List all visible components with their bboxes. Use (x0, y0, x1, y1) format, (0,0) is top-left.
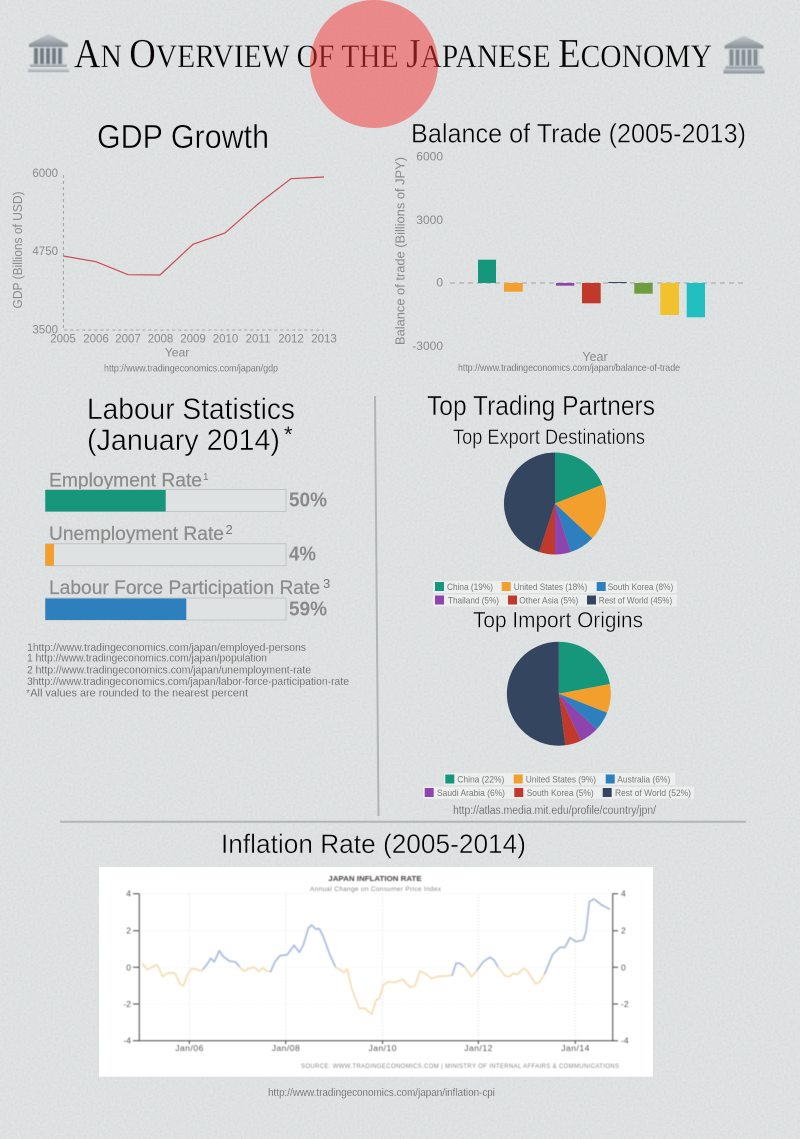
heading: Top Export Destinations: Top Export Destinations (453, 426, 645, 449)
footnotes: 1http://www.tradingeconomics.com/japan/employed-persons (27, 642, 306, 654)
footnotes: 2 http://www.tradingeconomics.com/japan/unemployment-rate (27, 664, 311, 676)
line chart: GDP: 2007 (115, 334, 141, 346)
chart image: Japan inflation rate: Jan/08 (272, 1043, 300, 1053)
legend: exports: Thailand (5%) (448, 596, 499, 606)
heading: Balance of Trade: Balance of Trade (2005-2013) (411, 119, 746, 149)
bar: employment rate: 1 (203, 472, 209, 483)
heading: Labour Statistics (87, 393, 295, 457)
heading: GDP Growth: GDP Growth (97, 118, 269, 155)
source: trading partners: http://atlas.media.mit.edu/profile/country/jpn/ (453, 805, 657, 817)
chart image: Japan inflation rate: Jan/10 (368, 1043, 397, 1053)
heading: Labour Statistics: (January 2014) (87, 424, 280, 457)
bar: unemployment rate: 2 (226, 522, 233, 537)
chart image: Japan inflation rate: 2 (621, 926, 626, 936)
source: inflation: http://www.tradingeconomics.com/japan/inflation-cpi (268, 1087, 495, 1099)
line chart: GDP (10, 168, 337, 360)
chart image: Japan inflation rate: 0 (621, 962, 626, 972)
chart image: Japan inflation rate: -4 (621, 1036, 629, 1046)
bar: unemployment rate (45, 522, 316, 566)
bar chart: balance of trade (392, 150, 743, 364)
line chart: GDP: 2009 (180, 334, 206, 346)
bar: employment rate: Employment Rate (49, 471, 202, 492)
bar chart: balance of trade: 6000 (416, 150, 443, 164)
panel: top trading partners (423, 390, 694, 817)
chart image: Japan inflation rate: Jan/06 (175, 1043, 204, 1053)
bar: unemployment rate: 4% (289, 544, 316, 566)
chart image: Japan inflation rate: JAPAN INFLATION RATE (328, 874, 422, 883)
legend: exports (433, 581, 677, 606)
heading: Inflation Rate: Inflation Rate (2005-2014) (221, 829, 526, 859)
legend: imports: South Korea (5%) (527, 788, 594, 799)
line chart: GDP: 3500 (32, 324, 58, 336)
bar: labour force participation rate: 3 (323, 576, 330, 591)
line chart: GDP: 2008 (148, 334, 173, 346)
heading: Labour Statistics: * (284, 422, 293, 447)
bar chart: balance of trade: Balance of trade (Billions of JPY) (392, 157, 408, 345)
chart image: Japan inflation rate: SOURCE: WWW.TRADINGECONOMICS.COM | MINISTRY OF INTERNAL AFFAIRS & COMMUNICATIONS (301, 1064, 619, 1070)
pie chart: exports (504, 452, 606, 554)
legend: imports: United States (9%) (526, 774, 596, 786)
panel: GDP growth (10, 118, 337, 375)
bar chart: balance of trade: 0 (436, 276, 443, 290)
line chart: GDP: 2010 (213, 334, 238, 346)
legend: imports: Australia (6%) (617, 774, 670, 786)
bar: labour force participation rate: 59% (289, 599, 327, 621)
icon: right bank building (724, 36, 764, 74)
panel: inflation rate (99, 829, 653, 1099)
chart image: Japan inflation rate: -2 (123, 999, 131, 1009)
legend: exports: Other Asia (5%) (519, 596, 578, 606)
bar chart: balance of trade: -3000 (412, 339, 443, 353)
line chart: GDP: 4750 (32, 246, 58, 258)
chart image: Japan inflation rate: Annual Change on Consumer Price Index (310, 886, 442, 893)
line chart: GDP: 2011 (246, 334, 270, 346)
panel: balance of trade (392, 119, 746, 374)
heading: Top Import Origins: Top Import Origins (473, 607, 643, 632)
legend: exports: United States (18%) (514, 582, 587, 593)
bar chart: balance of trade: 3000 (416, 213, 443, 227)
bar: unemployment rate: Unemployment Rate (49, 524, 224, 545)
bar: employment rate (45, 471, 327, 512)
line chart: GDP: 2013 (311, 334, 337, 346)
chart image: Japan inflation rate: Jan/12 (464, 1043, 493, 1053)
legend: imports (423, 773, 694, 799)
legend: exports: Rest of World (45%) (599, 596, 672, 606)
chart image: Japan inflation rate: -4 (123, 1036, 131, 1046)
chart image: Japan inflation rate (99, 867, 653, 1077)
panel: labour statistics (26, 393, 349, 700)
bar: employment rate: 50% (289, 490, 327, 512)
footnotes: 1 http://www.tradingeconomics.com/japan/population (27, 653, 267, 665)
line chart: GDP: 2012 (278, 334, 304, 346)
line chart: GDP: 2005 (50, 334, 76, 346)
icon: left bank building (28, 34, 69, 72)
line chart: GDP: Year (165, 346, 189, 360)
chart image: Japan inflation rate: 4 (621, 888, 626, 898)
legend: imports: Rest of World (52%) (615, 788, 691, 799)
source: balance of trade: http://www.tradingeconomics.com/japan/balance-of-trade (458, 362, 680, 374)
chart image: Japan inflation rate: -2 (621, 999, 629, 1009)
footnotes: 3http://www.tradingeconomics.com/japan/labor-force-participation-rate (27, 676, 349, 688)
source: GDP: http://www.tradingeconomics.com/japan/gdp (104, 363, 278, 375)
pie chart: imports (507, 642, 611, 746)
bar: labour force participation rate: Labour Force Participation Rate (49, 578, 320, 599)
footnotes: *All values are rounded to the nearest percent (26, 688, 248, 700)
line chart: GDP: 2006 (83, 334, 109, 346)
legend: exports: South Korea (8%) (608, 582, 673, 593)
heading: Labour Statistics: Labour Statistics (87, 393, 295, 426)
bar chart: balance of trade: Year (582, 350, 608, 364)
heading: Top Trading Partners: Top Trading Partners (427, 390, 655, 421)
chart image: Japan inflation rate: 0 (126, 962, 131, 972)
legend: exports: China (19%) (447, 582, 493, 593)
line chart: GDP: GDP (Billions of USD) (10, 192, 25, 308)
legend: imports: China (22%) (457, 774, 504, 786)
chart image: Japan inflation rate: 2 (126, 926, 131, 936)
footnotes (26, 642, 349, 700)
title: AN OVERVIEW OF THE JAPANESE ECONOMY (74, 30, 712, 76)
line chart: GDP: 6000 (32, 168, 58, 180)
bar: labour force participation rate (45, 576, 330, 621)
legend: imports: Saudi Arabia (6%) (437, 788, 505, 799)
chart image: Japan inflation rate: 4 (126, 888, 131, 898)
chart image: Japan inflation rate: Jan/14 (561, 1043, 590, 1053)
red sun circle (310, 0, 438, 128)
